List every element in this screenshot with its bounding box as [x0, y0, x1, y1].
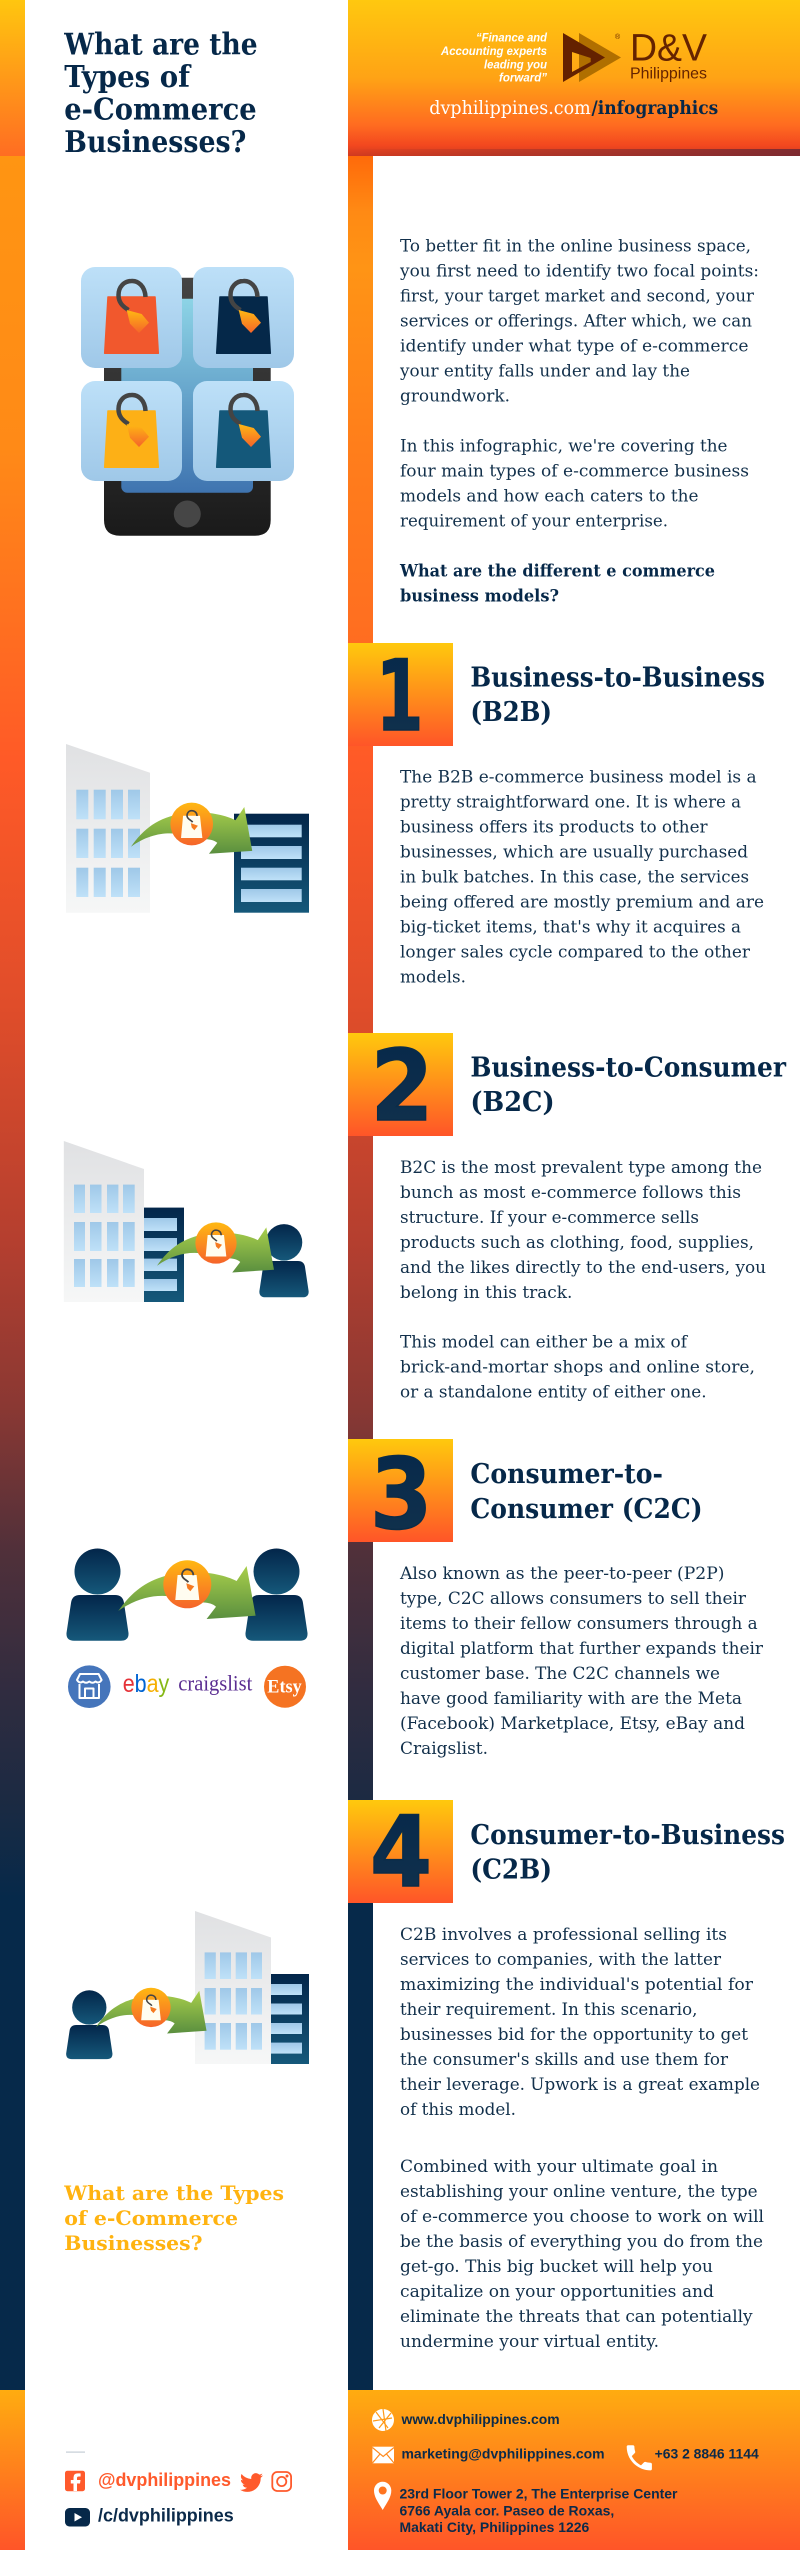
section 2 text: or a standalone entity of either one.	[400, 1383, 707, 1402]
closing text: capitalize on your opportunities and	[400, 2282, 714, 2301]
icon: twitter	[240, 2473, 263, 2492]
section 2 heading	[470, 1053, 787, 1118]
section 2 text: and the likes directly to the end-users, you	[400, 1258, 766, 1277]
tagline	[440, 33, 548, 85]
address: Makati City, Philippines 1226	[400, 2519, 589, 2535]
url: dvphilippines.com	[429, 98, 591, 119]
section 2 text: bunch as most e-commerce follows this	[400, 1183, 741, 1202]
section 1 heading	[470, 662, 765, 728]
intro text: models and how each caters to the	[400, 486, 698, 506]
section 2 text	[400, 1158, 766, 1402]
buyer	[245, 1548, 308, 1641]
bag badge	[163, 1560, 211, 1608]
intro text: you first need to identify two focal points:	[399, 261, 759, 280]
section 2 text: B2C is the most prevalent type among the	[400, 1158, 762, 1177]
section 2 number box	[348, 1030, 453, 1144]
tile: navy bag	[193, 267, 294, 368]
title: What are the	[63, 28, 258, 63]
closing text: get-go. This big bucket will help you	[400, 2257, 713, 2276]
header panel	[348, 0, 800, 156]
title: e-Commerce	[64, 92, 257, 127]
section 1 text: business offers its products to other	[400, 818, 708, 836]
section 3 text: have good familiarity with are the Meta	[400, 1689, 742, 1708]
icon: marketplace store	[68, 1665, 111, 1708]
website: www.dvphilippines.com	[401, 2411, 560, 2427]
closing text: undermine your virtual entity.	[400, 2332, 659, 2351]
tagline: forward”	[499, 73, 547, 85]
closing text: be the basis of everything you do from the	[400, 2232, 763, 2251]
section 3 number box: 3	[370, 1438, 432, 1552]
section 3 text: digital platform that further expands their	[400, 1639, 763, 1658]
section 2 text: belong in this track.	[400, 1283, 572, 1302]
arrow	[118, 1566, 256, 1619]
section 1 text: pretty straightforward one. It is where a	[400, 792, 741, 812]
closing text: establishing your online venture, the type	[400, 2182, 758, 2201]
logo: ebay: ebay	[123, 1670, 170, 1698]
youtube channel: /c/dvphilippines	[98, 2505, 234, 2526]
icon: globe	[372, 2409, 394, 2431]
intro text: services or offerings. After which, we can	[400, 311, 752, 330]
buyer building	[234, 814, 309, 913]
arrow	[157, 1227, 274, 1273]
intro text: four main types of e-commerce business	[400, 462, 749, 480]
section 1 text: in bulk batches. In this case, the services	[400, 868, 749, 886]
closing text: of e-commerce you choose to work on will	[400, 2207, 764, 2226]
seller building	[66, 744, 150, 913]
section 2 text: structure. If your e-commerce sells	[400, 1208, 699, 1227]
bag badge	[195, 1222, 237, 1264]
arrow	[96, 1991, 207, 2033]
yellow repeat title: What are the Types	[63, 2181, 284, 2205]
section 3 number box	[348, 1438, 453, 1552]
section 1 heading: Business-to-Business	[470, 662, 765, 693]
section 2 heading: (B2C)	[470, 1087, 555, 1118]
section 4 heading: (C2B)	[470, 1854, 552, 1886]
logo: etsy	[264, 1666, 306, 1708]
section 2 text: products such as clothing, food, supplies,	[400, 1233, 754, 1252]
left gradient strip	[0, 0, 25, 2550]
tile: yellow bag	[81, 381, 182, 481]
intro text	[399, 236, 759, 531]
illustration: business to consumer	[64, 1141, 309, 1302]
icon: map pin	[374, 2482, 391, 2510]
icon: phone	[627, 2445, 652, 2470]
address: 6766 Ayala cor. Paseo de Roxas,	[400, 2502, 614, 2518]
section 1 heading: (B2B)	[470, 697, 552, 728]
logo mark	[563, 33, 621, 82]
closing text	[400, 2157, 764, 2351]
illustration: consumer to consumer	[66, 1548, 308, 1708]
section 4 number box: 4	[370, 1796, 432, 1910]
intro question	[399, 562, 715, 606]
yellow repeat title: Businesses?	[64, 2231, 202, 2255]
phone number: +63 2 8846 1144	[655, 2446, 759, 2462]
logo text	[615, 28, 708, 82]
tagline: “Finance and	[476, 33, 548, 45]
section 1 text: businesses, which are usually purchased	[400, 842, 748, 862]
footer contact panel	[348, 2390, 800, 2550]
logo: etsy: Etsy	[267, 1676, 302, 1698]
section 1 text: longer sales cycle compared to the other	[400, 942, 750, 962]
section 3 text	[399, 1564, 763, 1758]
closing text: eliminate the threats that can potentially	[400, 2307, 753, 2326]
section 3 text: (Facebook) Marketplace, Etsy, eBay and	[400, 1714, 745, 1733]
intro question: What are the different e commerce	[399, 562, 715, 580]
section 1 text: being offered are mostly premium and are	[400, 892, 764, 912]
illustration: phone with shopping bags	[81, 267, 294, 536]
section 1 text: The B2B e-commerce business model is a	[400, 768, 757, 786]
section 3 text: customer base. The C2C channels we	[400, 1664, 720, 1683]
section 4 text: their requirement. In this scenario,	[400, 2000, 697, 2019]
address: 23rd Floor Tower 2, The Enterprise Center	[400, 2486, 678, 2502]
section 3 text: type, C2C allows consumers to sell their	[400, 1589, 746, 1608]
buyer building	[195, 1911, 271, 2064]
section 2 text: brick-and-mortar shops and online store,	[400, 1358, 755, 1377]
tile: teal bag	[193, 381, 294, 481]
section 2 number box: 2	[370, 1030, 434, 1144]
intro question: business models?	[400, 586, 559, 606]
section 3 heading: Consumer-to-	[470, 1459, 663, 1490]
intro text: To better fit in the online business space,	[400, 236, 751, 255]
url	[429, 98, 718, 119]
title	[63, 28, 258, 160]
icon: facebook	[65, 2471, 85, 2491]
seller	[66, 1548, 129, 1641]
section 1 text: big-ticket items, that's why it acquires a	[400, 918, 741, 936]
section 2 text: This model can either be a mix of	[400, 1333, 689, 1352]
icon: instagram	[272, 2472, 291, 2491]
right gradient strip	[348, 156, 373, 2390]
title: Businesses?	[64, 125, 246, 160]
intro text: your entity falls under and lay the	[399, 361, 690, 380]
icon: youtube	[65, 2508, 90, 2526]
section 1 text: models.	[400, 968, 466, 986]
section 4 text: the consumer's skills and use them for	[400, 2050, 728, 2069]
email: marketing@dvphilippines.com	[402, 2445, 605, 2461]
section 4 text: services to companies, with the latter	[400, 1950, 721, 1969]
tile: red bag	[81, 267, 182, 368]
phone body	[104, 278, 271, 536]
section 4 text: C2B involves a professional selling its	[400, 1925, 727, 1944]
closing text: Combined with your ultimate goal in	[400, 2157, 718, 2176]
section 1 number box	[348, 640, 453, 754]
section 4 text	[400, 1925, 760, 2119]
yellow repeat title: of e-Commerce	[64, 2206, 238, 2230]
intro text: first, your target market and second, your	[400, 286, 754, 305]
logo: craigslist: craigslist	[178, 1671, 252, 1696]
section 4 heading	[470, 1820, 785, 1886]
section 4 number box	[348, 1796, 453, 1910]
facebook handle: @dvphilippines	[98, 2469, 231, 2490]
intro text: In this infographic, we're covering the	[400, 436, 728, 456]
section 3 heading	[470, 1459, 703, 1525]
consumer	[259, 1224, 309, 1297]
section 3 text: Craigslist.	[400, 1739, 488, 1758]
section 3 text: Also known as the peer-to-peer (P2P)	[399, 1564, 724, 1583]
social block	[65, 2452, 291, 2526]
illustration: consumer to business	[66, 1911, 309, 2064]
section 1 number box: 1	[376, 640, 424, 754]
intro text: identify under what type of e-commerce	[400, 336, 748, 355]
section 4 text: maximizing the individual's potential for	[400, 1975, 753, 1994]
seller building	[64, 1141, 144, 1302]
section 1 text	[400, 768, 764, 986]
dark building	[271, 1974, 309, 2064]
url: /infographics	[592, 98, 718, 119]
yellow repeat title	[63, 2181, 284, 2255]
dark building	[144, 1208, 184, 1302]
bag badge	[131, 1988, 171, 2027]
tagline: leading you	[484, 59, 547, 71]
address	[400, 2486, 678, 2535]
consumer	[66, 1990, 112, 2059]
arrow	[131, 807, 252, 854]
illustration: business to business	[66, 744, 309, 913]
section 3 text: items to their fellow consumers through a	[400, 1614, 758, 1633]
icon: envelope	[372, 2447, 394, 2463]
title: Types of	[64, 60, 192, 95]
logo text: Philippines	[630, 65, 707, 82]
section 4 text: their leverage. Upwork is a great example	[400, 2075, 760, 2094]
intro text: groundwork.	[400, 386, 510, 405]
logo text: ®	[615, 33, 621, 41]
logo text: D&V	[630, 28, 708, 70]
bag badge	[170, 803, 213, 845]
tagline: Accounting experts	[440, 46, 547, 58]
intro text: requirement of your enterprise.	[400, 512, 668, 530]
section 4 text: businesses bid for the opportunity to get	[400, 2025, 748, 2044]
section 4 text: of this model.	[400, 2100, 516, 2119]
section 3 heading: Consumer (C2C)	[470, 1494, 703, 1525]
